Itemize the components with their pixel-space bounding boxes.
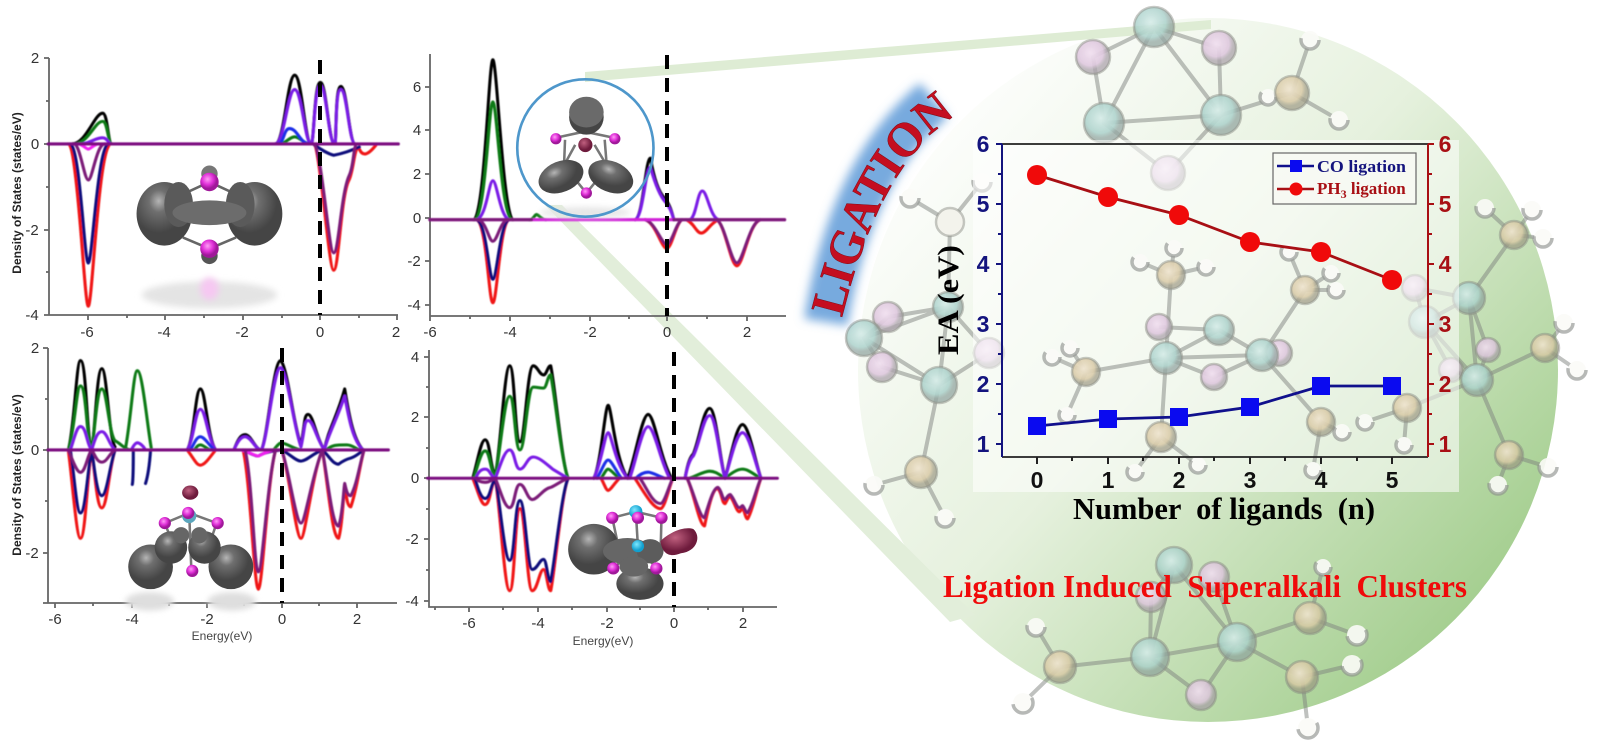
right axis labels: 5 [1439, 191, 1452, 217]
left axis labels: 5 [977, 191, 990, 217]
tick labels: 0 [31, 442, 39, 459]
left axis labels: 3 [977, 311, 989, 337]
left axis labels: 2 [977, 371, 989, 397]
caption: Ligation Induced Superalkali Clusters: Ligation Induced Superalkali Clusters [943, 568, 1467, 604]
tick labels: -2 [583, 324, 597, 341]
tick labels: -2 [235, 324, 249, 341]
molecule orbital D [568, 505, 697, 600]
molecule orbital C [125, 486, 256, 611]
tick labels: 0 [670, 615, 678, 632]
x axis labels: 5 [1386, 467, 1399, 493]
y axis title: EA (eV) [932, 245, 965, 355]
panel: DOS chart bottom-right [405, 349, 777, 648]
chart backing panel [973, 140, 1459, 492]
series: CO ligation [1028, 377, 1401, 435]
zoom beam: upper [585, 20, 1211, 82]
highlight ring [517, 79, 653, 217]
panel: DOS chart top-left [10, 50, 400, 341]
tick labels: -2 [25, 222, 39, 239]
tick labels: 2 [743, 324, 751, 341]
highlight circle with molecule orbital B [517, 79, 653, 218]
tick labels [25, 340, 361, 628]
DOS curves [48, 361, 388, 589]
legend: PH [1317, 179, 1341, 198]
right axis labels: 3 [1439, 311, 1451, 337]
axes [44, 58, 398, 320]
tick labels: 2 [353, 611, 361, 628]
right axis labels: 1 [1439, 431, 1452, 457]
tick labels: 4 [413, 122, 421, 139]
left axis labels: 6 [977, 131, 989, 157]
x axis labels: 4 [1315, 467, 1328, 493]
molecule: right cluster [1402, 199, 1586, 494]
right axis labels [1439, 131, 1452, 457]
tick labels [405, 349, 747, 632]
x-axis title: Energy(eV) [192, 629, 252, 643]
legend: CO ligation [1317, 157, 1407, 176]
tick labels: -4 [405, 593, 419, 610]
heading: LIGATION on glowing arc: LIGATION [811, 90, 952, 318]
legend: 3 [1341, 187, 1347, 201]
DOS curves [48, 75, 398, 306]
tick labels: -4 [407, 297, 421, 314]
panel: green superalkali sphere [858, 18, 1558, 722]
tick labels: 2 [411, 409, 419, 426]
tick labels: -6 [80, 324, 94, 341]
legend: ligation [1347, 179, 1406, 198]
axes [425, 54, 786, 321]
background molecule structures [846, 7, 1586, 738]
x axis title: Number of ligands (n) [1073, 491, 1375, 526]
tick labels: 2 [392, 324, 400, 341]
right axis labels: 4 [1439, 251, 1452, 277]
axes [996, 144, 1428, 457]
left axis labels: 4 [977, 251, 990, 277]
series: PH3 ligation [1027, 165, 1402, 290]
tick labels: -2 [405, 531, 419, 548]
tick labels: -4 [531, 615, 545, 632]
DOS curves [428, 366, 777, 591]
y-axis title: Density of States (states/eV) [10, 112, 24, 274]
tick labels: -4 [125, 611, 139, 628]
tick labels: 0 [278, 611, 286, 628]
chart: EA versus number of ligands [932, 131, 1452, 526]
x axis labels: 1 [1102, 467, 1115, 493]
x axis labels [1031, 467, 1399, 493]
tick labels [25, 50, 400, 341]
tick labels: 2 [413, 166, 421, 183]
Fermi level dashed line [665, 55, 669, 316]
molecule orbital: Li-based cluster A [137, 166, 282, 308]
tick labels: 0 [411, 470, 419, 487]
axes [43, 348, 397, 608]
tick labels: -4 [157, 324, 171, 341]
tick labels [407, 79, 751, 341]
zoom beam: lower [545, 205, 975, 622]
tick labels: -2 [407, 253, 421, 270]
tick labels: -6 [423, 324, 437, 341]
Fermi level dashed line [318, 60, 322, 315]
tick labels: 2 [739, 615, 747, 632]
tick labels: 0 [663, 324, 671, 341]
tick labels: -4 [25, 307, 39, 324]
legend [1273, 153, 1416, 204]
tick labels: -6 [48, 611, 62, 628]
tick labels: 2 [31, 50, 39, 67]
panel: DOS chart bottom-left [10, 340, 397, 643]
tick labels: -6 [462, 615, 476, 632]
molecule: centre cluster over chart [1044, 240, 1421, 480]
tick labels: -2 [25, 545, 39, 562]
right axis labels: 6 [1439, 131, 1451, 157]
Fermi level dashed line [672, 352, 676, 607]
right axis labels: 2 [1439, 371, 1451, 397]
molecule: top cluster [1076, 7, 1348, 190]
Fermi level dashed line [280, 348, 284, 603]
left axis labels: 1 [977, 431, 990, 457]
x axis labels: 0 [1031, 467, 1043, 493]
x axis labels: 2 [1173, 467, 1185, 493]
tick labels: 0 [316, 324, 324, 341]
molecule: bottom cluster [1013, 547, 1367, 738]
axes [424, 350, 777, 612]
tick labels: 2 [31, 340, 39, 357]
DOS curves [430, 60, 785, 303]
panel: DOS chart top-right [407, 54, 786, 341]
tick labels: 0 [413, 210, 421, 227]
y-axis title: Density of States (states/eV) [10, 394, 24, 556]
left axis labels [977, 131, 990, 457]
tick labels: 4 [411, 349, 419, 366]
tick labels: -2 [600, 615, 614, 632]
tick labels: 6 [413, 79, 421, 96]
tick labels: -2 [200, 611, 214, 628]
molecule: left cluster [846, 173, 1004, 527]
x-axis title: Energy(eV) [573, 634, 633, 648]
tick labels: 0 [31, 136, 39, 153]
tick labels: -4 [503, 324, 517, 341]
x axis labels: 3 [1244, 467, 1256, 493]
